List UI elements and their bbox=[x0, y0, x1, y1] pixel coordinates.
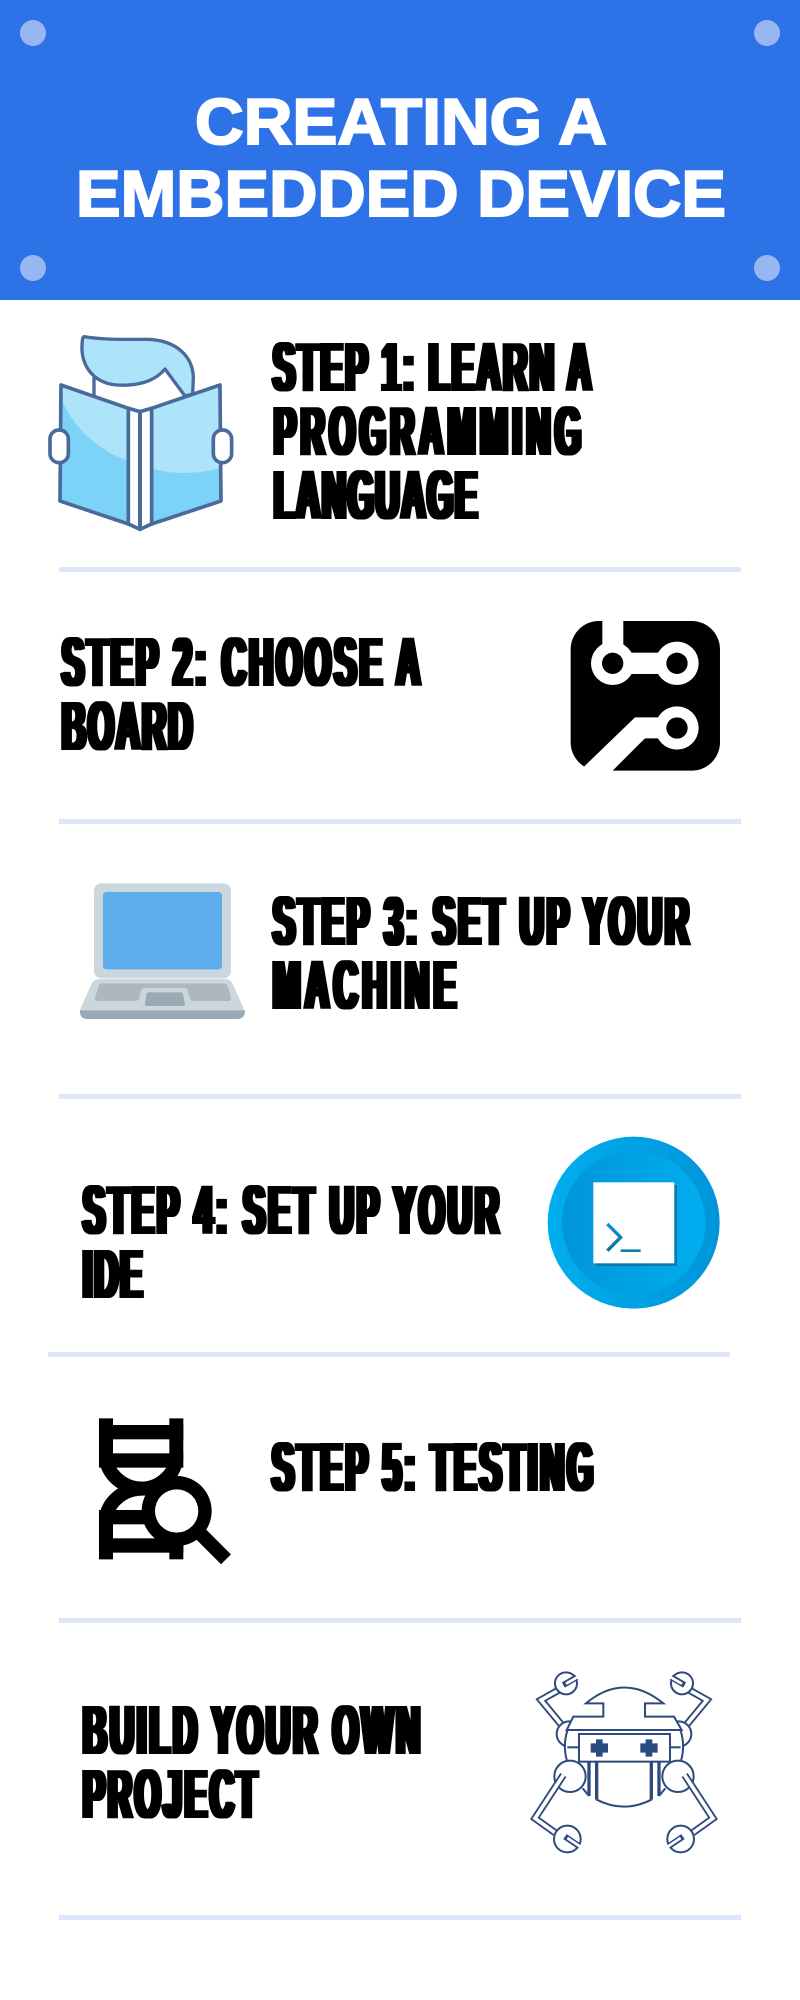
heading: step 3: STEP 3: SET UP YOUR bbox=[273, 881, 689, 960]
title: CREATING A bbox=[195, 85, 607, 158]
heading: step 3: MACHINE bbox=[273, 945, 456, 1024]
heading: step 4: IDE bbox=[83, 1234, 142, 1313]
heading: step 4 bbox=[83, 1170, 499, 1313]
heading: step 2 bbox=[62, 622, 420, 765]
heading: build your own project bbox=[83, 1690, 420, 1833]
heading: step 3 bbox=[273, 881, 689, 1024]
heading: build your own project: BUILD YOUR OWN bbox=[83, 1690, 420, 1769]
heading: step 1: PROGRAMMING bbox=[274, 391, 581, 470]
heading: step 2: BOARD bbox=[62, 686, 192, 765]
heading: step 1: STEP 1: LEARN A bbox=[273, 327, 591, 406]
heading: build your own project: PROJECT bbox=[83, 1754, 257, 1833]
divider 6 bbox=[59, 1915, 741, 1920]
corner dots bbox=[20, 20, 780, 281]
divider 4 bbox=[48, 1352, 730, 1357]
icon: robot bbox=[535, 1672, 713, 1852]
icon: terminal bbox=[548, 1137, 720, 1309]
divider 5 bbox=[59, 1618, 741, 1623]
heading: step 1: LANGUAGE bbox=[274, 455, 477, 534]
title: EMBEDDED DEVICE bbox=[76, 157, 726, 230]
icon: laptop bbox=[80, 883, 245, 1019]
icon: book reader bbox=[50, 337, 232, 529]
divider 1 bbox=[59, 567, 741, 572]
heading: step 2: STEP 2: CHOOSE A bbox=[62, 622, 420, 701]
divider 3 bbox=[59, 1094, 741, 1099]
title bbox=[76, 85, 726, 230]
heading: step 1 bbox=[273, 327, 591, 534]
icon: circuit board bbox=[571, 618, 720, 773]
header banner bbox=[0, 0, 800, 300]
heading: step 5: STEP 5: TESTING bbox=[272, 1427, 593, 1506]
divider 2 bbox=[59, 819, 741, 824]
heading: step 4: STEP 4: SET UP YOUR bbox=[83, 1170, 499, 1249]
icon: dna with magnifier bbox=[99, 1418, 226, 1559]
